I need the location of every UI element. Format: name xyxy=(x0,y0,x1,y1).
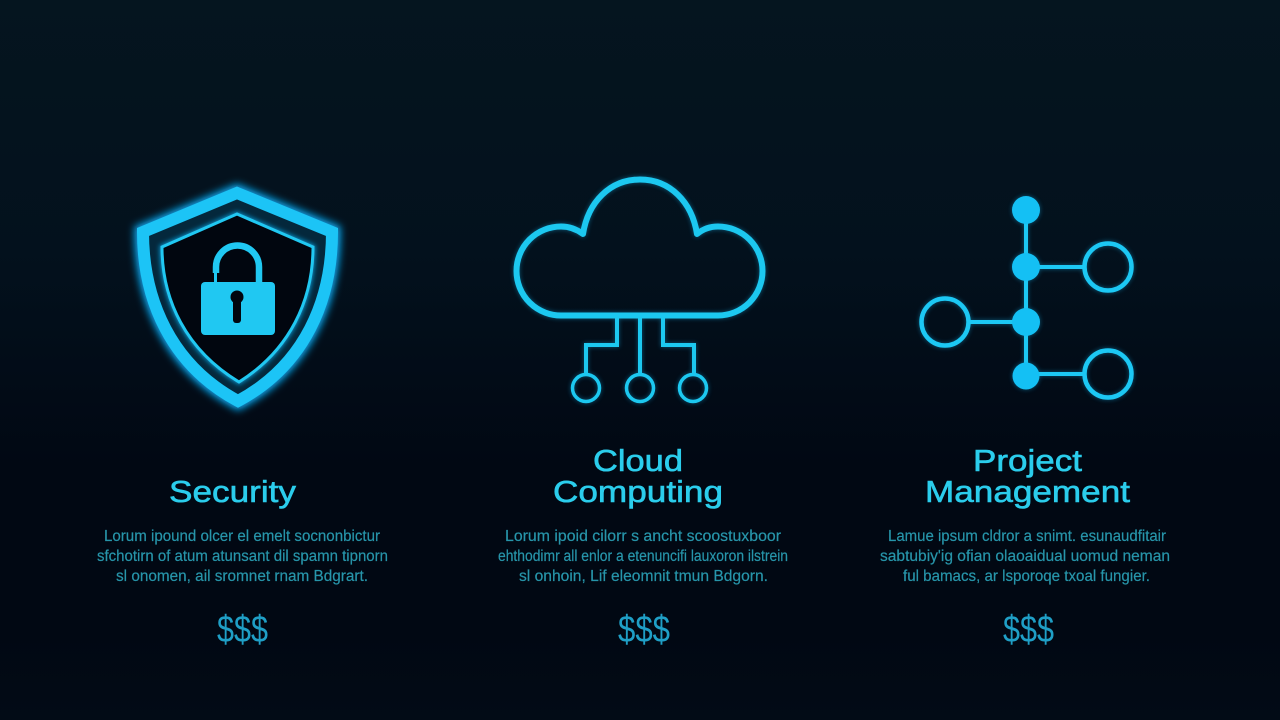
text block: cloud description xyxy=(498,528,788,585)
price: security: $$$ xyxy=(217,609,268,651)
text block: security description xyxy=(97,528,388,585)
icon: shield with padlock xyxy=(143,193,332,401)
icon: project network nodes xyxy=(922,196,1132,398)
price: project: $$$ xyxy=(1003,609,1054,651)
text block: security description: sl onomen, ail sromnet rnam Bdgrart. xyxy=(116,568,368,585)
icon: cloud with circuit nodes xyxy=(516,180,762,402)
text block: security description: sfchotirn of atum atunsant dil spamn tipnorn xyxy=(97,548,388,565)
text block: cloud description: Lorum ipoid cilorr s ancht scoostuxboor xyxy=(505,528,781,545)
heading: Project Management: Project xyxy=(973,443,1082,478)
heading: Cloud Computing: Cloud xyxy=(593,443,683,478)
heading: Cloud Computing xyxy=(553,443,723,509)
heading: Project Management: Management xyxy=(925,474,1130,509)
price: cloud: $$$ xyxy=(618,609,670,651)
heading: Cloud Computing: Computing xyxy=(553,474,723,509)
heading: Project Management xyxy=(925,443,1130,509)
text block: project description: sabtubiy'ig ofian olaoaidual uomud neman xyxy=(880,548,1170,565)
text block: cloud description: sl onhoin, Lif eleomnit tmun Bdgorn. xyxy=(519,568,768,585)
heading: Security: Security xyxy=(169,474,297,509)
text block: project description: ful bamacs, ar lsporoqe txoal fungier. xyxy=(903,568,1150,585)
text block: cloud description: ehthodimr all enlor a etenuncifi lauxoron ilstrein xyxy=(498,548,788,565)
text block: project description xyxy=(880,528,1170,585)
text block: security description: Lorum ipound olcer el emelt socnonbictur xyxy=(104,528,380,545)
text block: project description: Lamue ipsum cldror a snimt. esunaudfitair xyxy=(888,528,1166,545)
